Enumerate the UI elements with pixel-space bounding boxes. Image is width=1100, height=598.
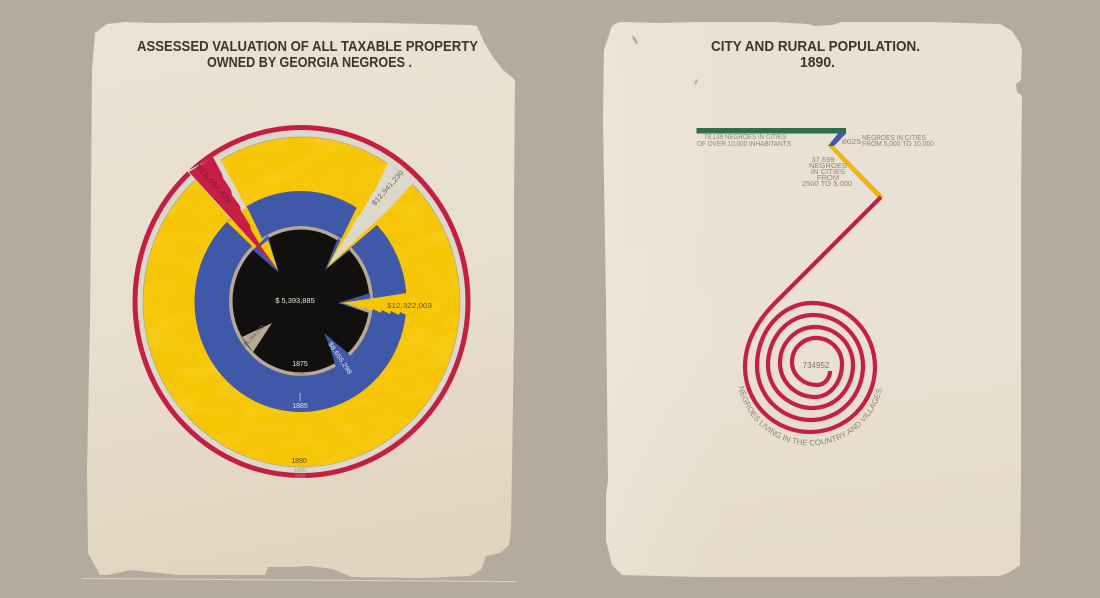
wedge: 1890 yellow: [338, 293, 432, 316]
label: cities over 10,000: [697, 132, 791, 148]
wedge: 1885 blue: $8,655,298: [326, 341, 353, 376]
wedge: 1895 cream: $12,941,230: [370, 168, 405, 207]
chart: population spiral line: [696, 128, 884, 432]
year labels: 1890: [291, 458, 307, 465]
paper smudges: [631, 35, 698, 85]
wedge: 1880 tan: $5,764,293: [243, 324, 266, 348]
wedge: 1885 blue: [324, 333, 353, 376]
lighter left paper edge: [603, 22, 1022, 577]
label: rural caption along arc: NEGROES LIVING IN THE COUNTRY AND VILLAGES.: [738, 386, 882, 446]
panel: city and rural population sheet: [603, 22, 1022, 577]
label: cities over 10,000: 78,139 NEGROES IN CITIES: [704, 132, 786, 141]
panel: assessed valuation sheet: [82, 22, 516, 582]
label: cities 2,500 to 5,000: 37,699: [811, 155, 835, 164]
outer 1899 red ring: [135, 128, 468, 476]
title right: [711, 38, 920, 71]
1885 blue ring: [194, 191, 406, 412]
title right: CITY AND RURAL POPULATION.: [711, 38, 920, 55]
wedge: 1899 red: $13,447,423: [194, 162, 233, 205]
spiral: country and villages red: [745, 197, 881, 432]
bottom white edge line: [82, 578, 516, 582]
segment: cities 5,000 to 10,000 blue: [828, 134, 846, 146]
wedge: 1880 tan: [242, 323, 272, 352]
torn paper sheet right: [603, 22, 1022, 577]
year labels: [291, 361, 308, 480]
label: cities 2,500 to 5,000: [802, 155, 852, 188]
label: cities 5,000 to 10,000: [842, 133, 934, 148]
label: cities 5,000 to 10,000: 8025: [842, 137, 861, 146]
value label 1875: $ 5,393,885: [275, 296, 315, 305]
label: cities 2,500 to 5,000: NEGROES: [809, 161, 847, 170]
chart: concentric valuation circles: [135, 128, 468, 480]
label: cities over 10,000: OF OVER 10,000 INHABITANTS: [697, 139, 791, 148]
torn paper sheet left: [87, 22, 515, 578]
year labels: 1880: [294, 372, 306, 378]
bar: cities over 10,000 green: [696, 128, 846, 134]
label: cities 2,500 to 5,000: 2500 TO 5,000: [802, 179, 852, 188]
label: rural value: 734952: [803, 361, 830, 370]
title right: 1890.: [800, 54, 835, 71]
1890 yellow ring: [143, 137, 460, 467]
label: cities 5,000 to 10,000: NEGROES IN CITIES: [862, 133, 926, 142]
title left: OWNED BY GEORGIA NEGROES .: [207, 54, 412, 71]
label: cities 2,500 to 5,000: FROM: [817, 173, 839, 182]
1875 black core: [232, 230, 370, 372]
year labels: 1895: [294, 468, 306, 474]
title left: [137, 38, 478, 71]
year labels: 1885: [292, 403, 308, 410]
label: cities 2,500 to 5,000: IN CITIES: [811, 167, 845, 176]
label: cities 5,000 to 10,000: FROM 5,000 TO 10,000: [862, 139, 934, 148]
year labels: 1875: [292, 361, 308, 368]
yellow paint mottling: [143, 137, 460, 467]
segment: cities 2,500 to 5,000 yellow: [828, 146, 884, 197]
wedge: 1890 yellow: $12,322,003: [387, 301, 432, 310]
title left: ASSESSED VALUATION OF ALL TAXABLE PROPERTY: [137, 38, 478, 55]
wedge: 1899 red: [187, 155, 278, 272]
year labels: 1899: [294, 474, 306, 480]
wedge: 1895 cream: [325, 163, 413, 270]
1880 tan ring: [229, 226, 373, 376]
